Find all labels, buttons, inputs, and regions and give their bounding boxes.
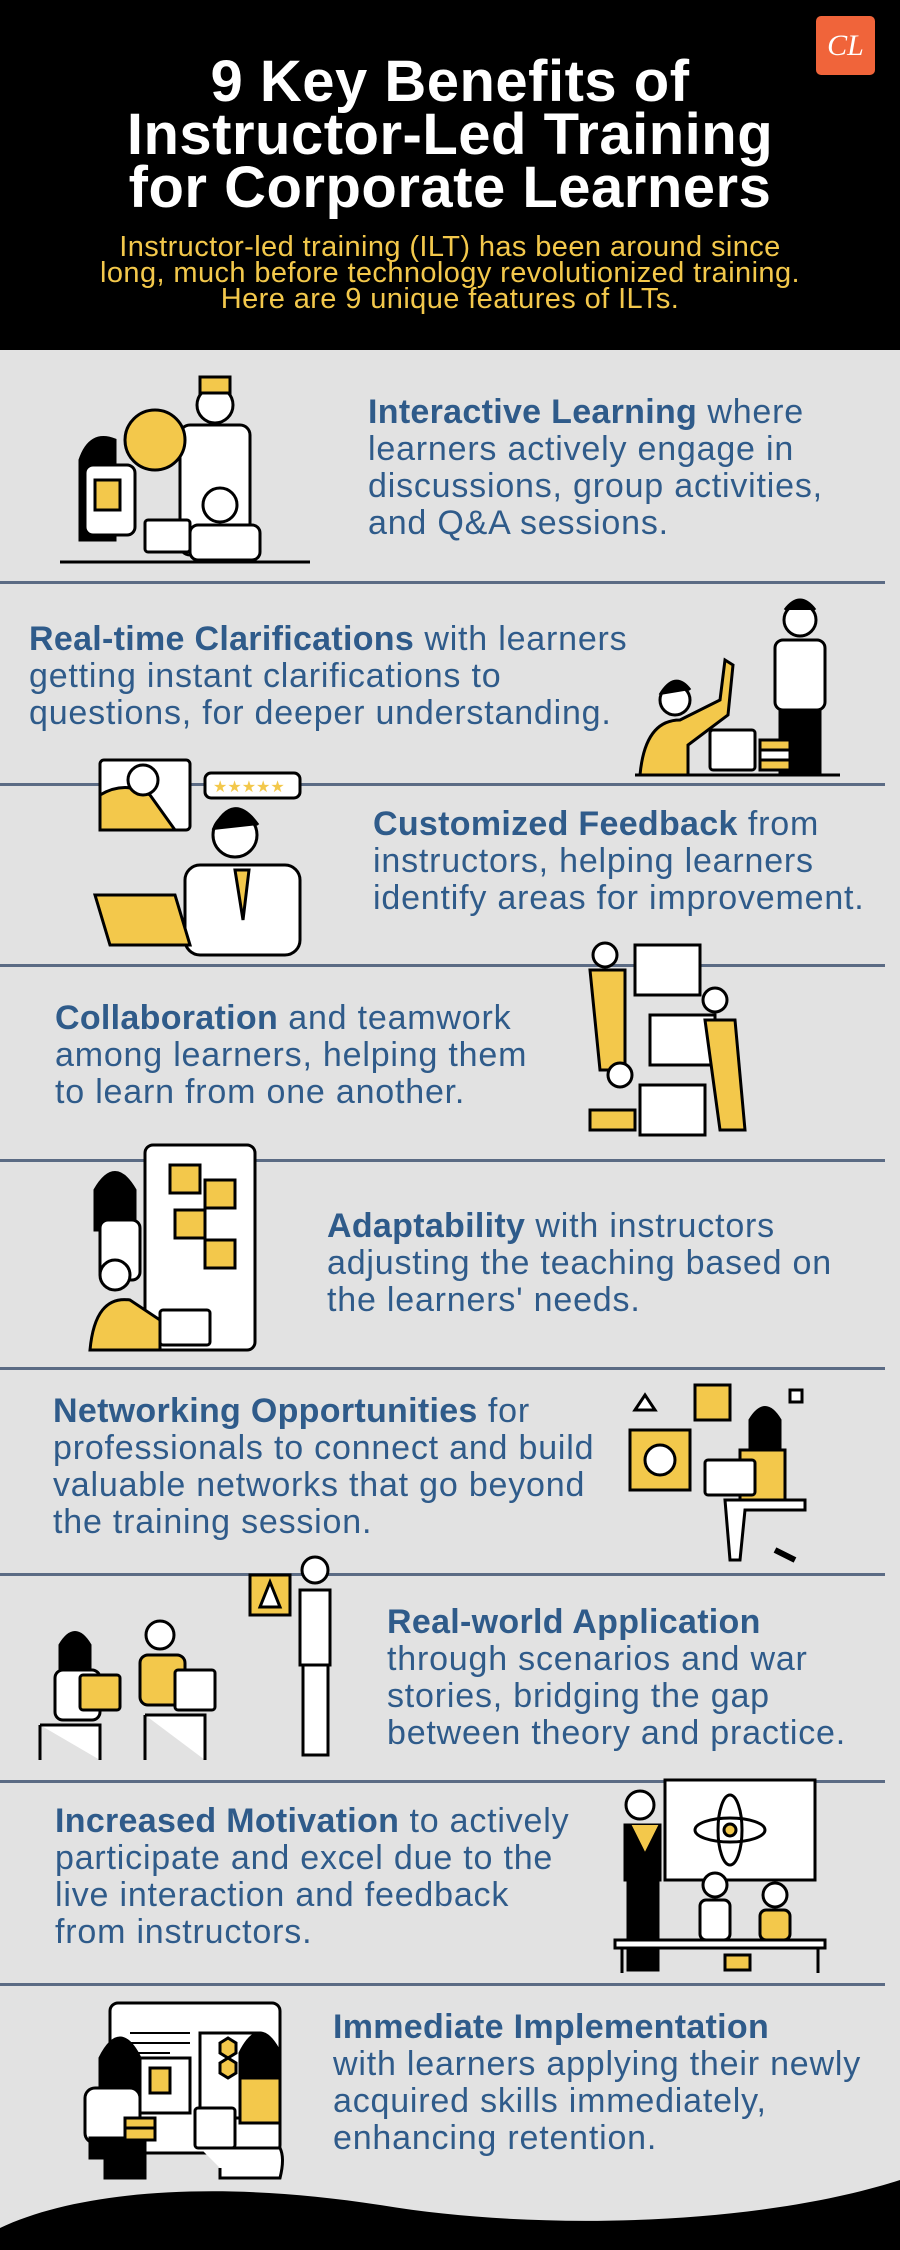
illustration: two women at board [84, 2002, 284, 2180]
text: interactive learning [368, 393, 823, 542]
text: immediate implementation: acquired skills immediately, [333, 2082, 767, 2120]
text: real-world application [387, 1603, 846, 1752]
text: increased motivation: participate and excel due to the [55, 1839, 553, 1877]
text: real-world application: stories, bridging the gap [387, 1677, 770, 1715]
text: real-world application: between theory and practice. [387, 1714, 846, 1752]
bottom wave [0, 2180, 900, 2250]
text: collaboration: Collaboration and teamwork [55, 999, 511, 1037]
illustration: group with globe [60, 376, 310, 564]
text: customized feedback: Customized Feedback from [373, 805, 819, 843]
text: interactive learning: Interactive Learning where [368, 393, 804, 431]
subtitle: Here are 9 unique features of ILTs. [221, 283, 679, 315]
text: increased motivation: Increased Motivation to actively [55, 1802, 569, 1840]
text: interactive learning: discussions, group activities, [368, 467, 823, 505]
subtitle: Instructor-led training (ILT) has been around since [119, 231, 781, 263]
text: increased motivation [55, 1802, 569, 1951]
text: immediate implementation [333, 2008, 861, 2157]
illustration: team with boxes [588, 942, 747, 1136]
header background [0, 0, 900, 350]
subtitle [100, 231, 800, 315]
text: adaptability: the learners' needs. [327, 1281, 641, 1319]
text: collaboration [55, 999, 527, 1111]
logo: CL [827, 29, 864, 62]
text: customized feedback [373, 805, 865, 917]
title: 9 Key Benefits of [210, 49, 690, 114]
text: real-world application: Real-world Application [387, 1603, 761, 1641]
text: increased motivation: from instructors. [55, 1913, 312, 1951]
title: Instructor-Led Training [127, 102, 773, 167]
text: customized feedback: instructors, helping learners [373, 842, 814, 880]
text: adaptability: Adaptability with instructors [327, 1207, 775, 1245]
illustration: presentation team [38, 1556, 332, 1760]
illustration: classroom with atom [614, 1778, 826, 1973]
text: immediate implementation: with learners applying their newly [333, 2045, 861, 2083]
illustration: board with puzzle [88, 1144, 256, 1352]
illustration: man at laptop with feedback: ★★★★★ [213, 779, 285, 796]
text: interactive learning: and Q&A sessions. [368, 504, 669, 542]
text: real-time clarifications: Real-time Clarifications with learners [29, 620, 627, 658]
logo [816, 16, 875, 75]
title [127, 49, 773, 220]
text: adaptability [327, 1207, 832, 1319]
text: real-world application: through scenarios and war [387, 1640, 808, 1678]
text: increased motivation: live interaction and feedback [55, 1876, 509, 1914]
text: interactive learning: learners actively engage in [368, 430, 794, 468]
illustration: man at laptop with feedback [93, 758, 302, 956]
text: networking: the training session. [53, 1503, 372, 1541]
text: collaboration: to learn from one another. [55, 1073, 465, 1111]
title: for Corporate Learners [129, 155, 771, 220]
text: immediate implementation: Immediate Implementation [333, 2008, 769, 2046]
text: collaboration: among learners, helping them [55, 1036, 527, 1074]
text: networking: professionals to connect and build [53, 1429, 594, 1467]
text: real-time clarifications [29, 620, 627, 732]
text: networking: Networking Opportunities for [53, 1392, 530, 1430]
illustration: student raising hand [635, 598, 840, 776]
text: networking: valuable networks that go beyond [53, 1466, 585, 1504]
text: customized feedback: identify areas for improvement. [373, 879, 865, 917]
text: adaptability: adjusting the teaching based on [327, 1244, 832, 1282]
text: networking [53, 1392, 594, 1541]
text: real-time clarifications: questions, for deeper understanding. [29, 694, 612, 732]
subtitle: long, much before technology revolutionized training. [100, 257, 800, 289]
illustration: woman on laptop with avatars [628, 1384, 806, 1563]
text: immediate implementation: enhancing retention. [333, 2119, 657, 2157]
text: real-time clarifications: getting instant clarifications to [29, 657, 501, 695]
